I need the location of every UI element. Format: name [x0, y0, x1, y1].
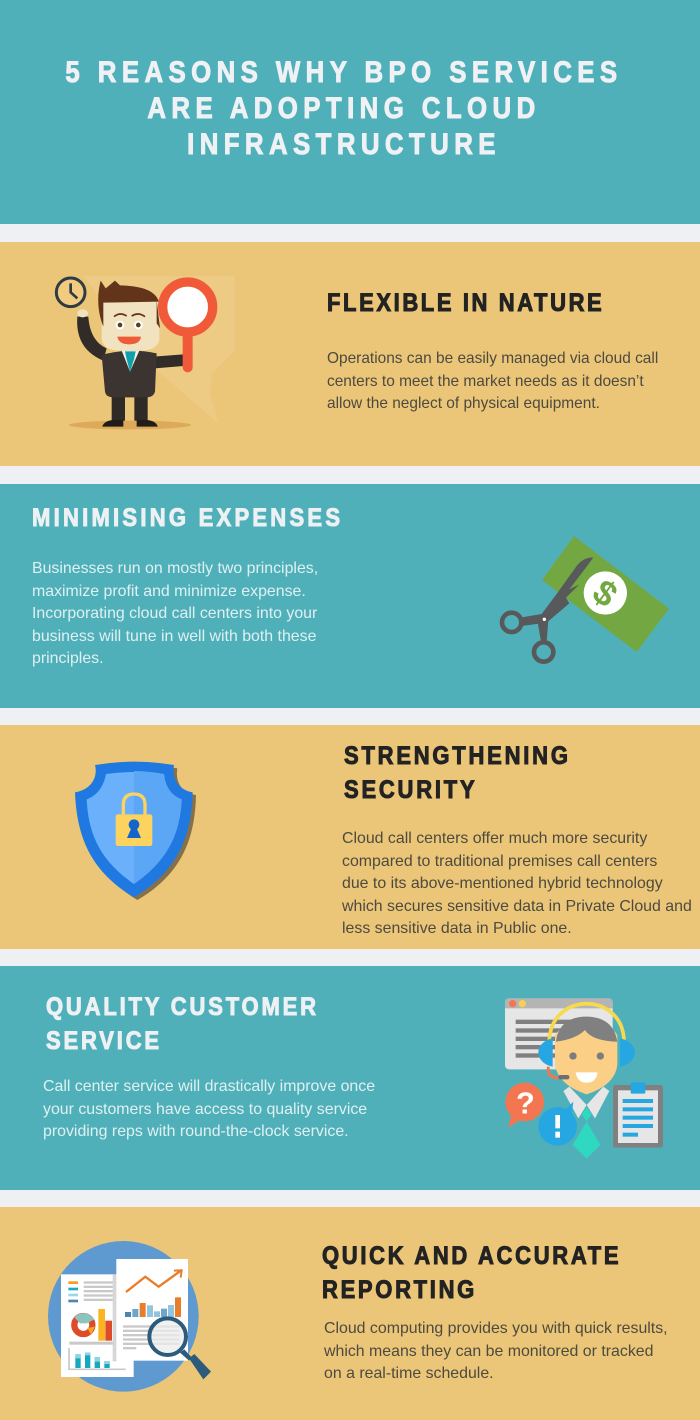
- body text: which secures sensitive data in Private Cloud and: [342, 898, 692, 915]
- body text: Businesses run on mostly two principles,: [32, 560, 318, 577]
- icon: scissors cutting a dollar bill: $: [585, 572, 625, 615]
- heading: SERVICE: [46, 1027, 162, 1055]
- body text: Cloud call centers offer much more security: [342, 830, 647, 847]
- title: [65, 56, 622, 161]
- heading: [344, 742, 571, 804]
- panel: minimising expenses: [0, 484, 700, 708]
- icon: scissors cutting a dollar bill: [500, 536, 669, 664]
- body text: which means they can be monitored or tracked: [324, 1343, 653, 1360]
- panel: flexible in nature: [0, 242, 700, 466]
- body text: providing reps with round-the-clock service.: [43, 1123, 349, 1140]
- body text: Operations can be easily managed via cloud call: [327, 350, 658, 367]
- icon: businessman holding magnifier with clock: [54, 276, 235, 430]
- icon: call center agent with headset: ?: [516, 1087, 535, 1121]
- heading: [46, 993, 319, 1055]
- body text: [342, 830, 692, 937]
- heading: QUICK AND ACCURATE: [322, 1242, 621, 1270]
- body text: your customers have access to quality service: [43, 1101, 367, 1118]
- heading: [322, 1242, 621, 1304]
- heading: REPORTING: [322, 1276, 477, 1304]
- body text: compared to traditional premises call centers: [342, 853, 657, 870]
- body text: Call center service will drastically improve once: [43, 1078, 375, 1095]
- body text: due to its above-mentioned hybrid technology: [342, 875, 663, 892]
- body text: [327, 350, 658, 412]
- body text: allow the neglect of physical equipment.: [327, 395, 600, 412]
- panel: title banner: [0, 0, 700, 224]
- body text: Cloud computing provides you with quick results,: [324, 1320, 668, 1337]
- heading: SECURITY: [344, 776, 477, 804]
- body text: less sensitive data in Public one.: [342, 920, 572, 937]
- body text: [324, 1320, 668, 1382]
- body text: Incorporating cloud call centers into your: [32, 605, 317, 622]
- body text: centers to meet the market needs as it doesn’t: [327, 373, 644, 390]
- icon: reports with charts and magnifier: [48, 1241, 211, 1392]
- panel: quality customer service: [0, 966, 700, 1190]
- icon: call center agent with headset: [505, 998, 663, 1158]
- body text: principles.: [32, 650, 104, 667]
- icon: shield with padlock: [75, 762, 196, 900]
- body text: [32, 560, 318, 667]
- title: 5 REASONS WHY BPO SERVICES: [65, 56, 622, 89]
- heading: STRENGTHENING: [344, 742, 571, 770]
- body text: [43, 1078, 375, 1140]
- panel: quick and accurate reporting: [0, 1207, 700, 1420]
- title: INFRASTRUCTURE: [187, 128, 500, 161]
- panel: strengthening security: [0, 725, 700, 949]
- body text: business will tune in well with both these: [32, 628, 316, 645]
- heading: FLEXIBLE IN NATURE: [327, 289, 604, 317]
- heading: QUALITY CUSTOMER: [46, 993, 319, 1021]
- body text: maximize profit and minimize expense.: [32, 583, 306, 600]
- title: ARE ADOPTING CLOUD: [147, 92, 540, 125]
- heading: MINIMISING EXPENSES: [32, 504, 343, 532]
- body text: on a real-time schedule.: [324, 1365, 494, 1382]
